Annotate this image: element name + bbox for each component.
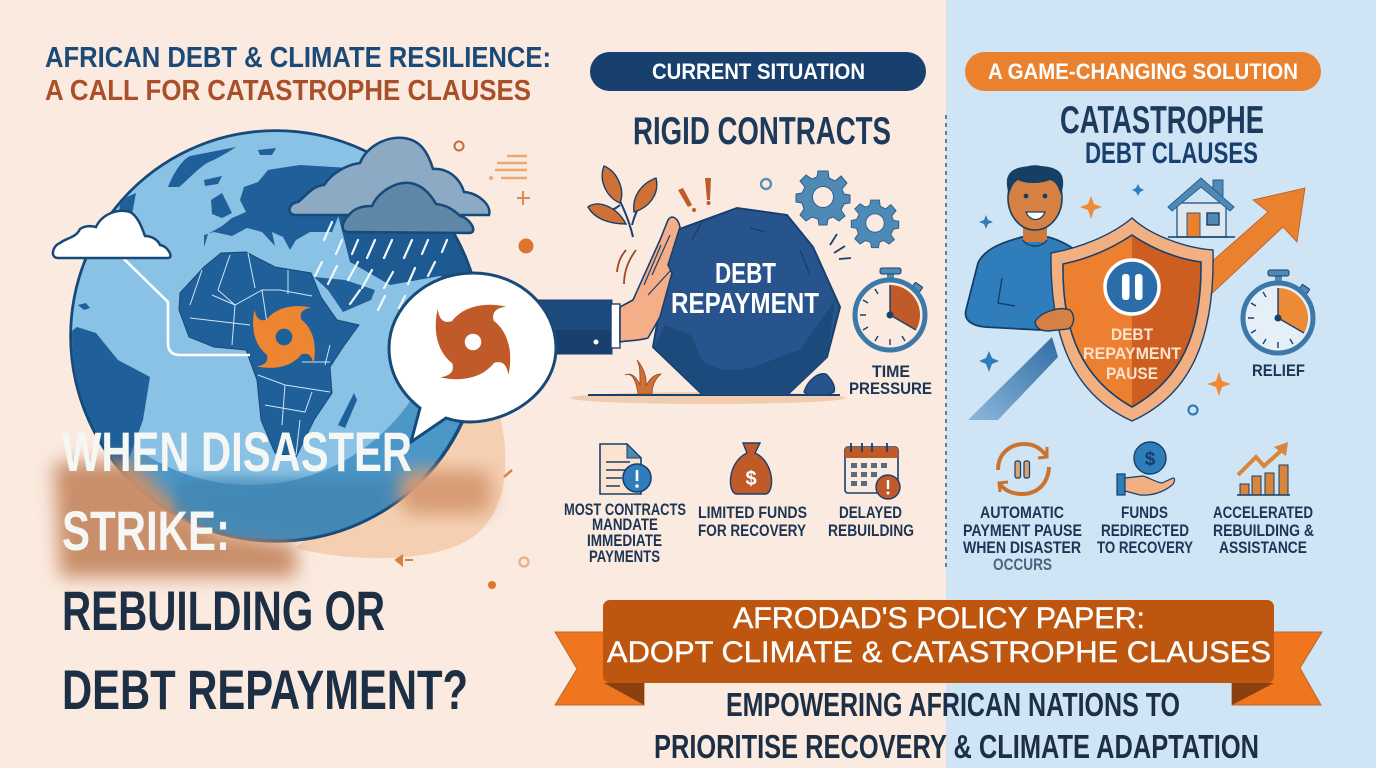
label: accelerated rebuilding — [1213, 503, 1314, 557]
headline: when disaster strike: REBUILDING OR — [62, 579, 385, 642]
ribbon tails — [555, 632, 1322, 705]
icon: white cloud — [53, 211, 170, 258]
icon: gear large — [796, 171, 850, 225]
pill: current situation: CURRENT SITUATION — [652, 59, 865, 84]
icon: growth arrow back — [968, 337, 1058, 420]
icon: automatic cycle — [998, 444, 1049, 494]
icon: person — [966, 166, 1085, 330]
label: automatic payment pause: OCCURS — [993, 555, 1052, 574]
icon: boulder debt repayment — [653, 208, 840, 395]
icon: document alert — [600, 444, 651, 494]
continent: Africa — [179, 252, 359, 457]
heading: catastrophe debt clauses: CATASTROPHE — [1060, 99, 1264, 142]
label: relief: RELIEF — [1252, 361, 1305, 380]
label: time pressure: TIME — [872, 362, 910, 381]
icon: strain lines — [830, 234, 851, 259]
label: automatic payment pause: AUTOMATIC — [980, 503, 1064, 522]
icon: stopwatch time pressure — [855, 268, 925, 350]
icon: small ring — [761, 179, 771, 189]
icon: house — [1168, 178, 1235, 237]
banner: policy paper: AFRODAD'S POLICY PAPER: — [733, 602, 1145, 635]
label: limited funds: FOR RECOVERY — [698, 521, 807, 540]
icon: motion lines — [617, 250, 636, 284]
label: contracts: IMMEDIATE — [587, 531, 662, 550]
label: funds redirected: FUNDS — [1121, 503, 1168, 522]
label: time pressure: PRESSURE — [849, 379, 932, 398]
icon: person's hand on shield — [1035, 309, 1074, 331]
boulder text: DEBT — [715, 258, 776, 290]
boulder text — [671, 258, 819, 320]
icon: hand with coin: $ — [1145, 449, 1156, 470]
label: delayed rebuilding: REBUILDING — [828, 521, 914, 540]
headline: when disaster strike: DEBT REPAYMENT? — [62, 658, 468, 721]
label: automatic payment pause — [963, 503, 1082, 574]
label: automatic payment pause: WHEN DISASTER — [963, 538, 1081, 557]
ground line — [570, 392, 846, 404]
icon: leaves — [588, 166, 657, 237]
sparkles — [979, 184, 1231, 414]
icon: stopwatch relief — [1243, 270, 1313, 353]
blurred smears behind headline — [54, 462, 492, 577]
label: contracts: PAYMENTS — [589, 547, 660, 566]
dark ocean region under the storm — [338, 216, 470, 285]
pill: solution: A GAME-CHANGING SOLUTION — [988, 59, 1298, 84]
label: accelerated rebuilding: ASSISTANCE — [1219, 538, 1307, 557]
globe illustration — [69, 129, 472, 543]
headline: when disaster strike: WHEN DISASTER — [62, 420, 412, 483]
icon: gear small — [851, 200, 899, 248]
headline: when disaster strike: STRIKE: — [62, 499, 230, 562]
label: contracts: MANDATE — [592, 515, 658, 534]
banner: policy paper — [555, 600, 1322, 705]
shield text: PAUSE — [1106, 364, 1158, 383]
label: delayed rebuilding: DELAYED — [839, 503, 902, 522]
icon: speech bubble with cyclone — [389, 273, 556, 442]
title: A CALL FOR CATASTROPHE CLAUSES — [45, 75, 531, 107]
icon: growth chart — [1237, 442, 1290, 495]
label: limited funds — [698, 503, 807, 540]
pill: current situation — [590, 52, 926, 91]
icon: money bag: $ — [745, 468, 757, 490]
decorative marks — [396, 142, 534, 589]
heading: catastrophe debt clauses — [1060, 99, 1264, 170]
shield text — [1083, 325, 1182, 383]
boulder text: REPAYMENT — [671, 288, 819, 320]
label: contracts: MOST CONTRACTS — [564, 500, 686, 519]
label: delayed rebuilding — [828, 503, 914, 540]
continent: South America — [72, 327, 150, 469]
label: funds redirected: TO RECOVERY — [1097, 538, 1194, 557]
label: time pressure — [849, 362, 932, 398]
icon: growth arrow orange — [1200, 188, 1305, 300]
label: accelerated rebuilding: ACCELERATED — [1213, 503, 1313, 522]
banner: policy paper: ADOPT CLIMATE & CATASTROPHE CLAUSES — [607, 636, 1271, 669]
continent: Madagascar — [338, 393, 357, 428]
icon: orange cyclone on Africa — [253, 306, 315, 368]
shield text: DEBT — [1111, 325, 1154, 344]
icon: hand — [611, 217, 680, 348]
headline: when disaster strike — [62, 420, 468, 721]
icon: storm clouds — [289, 138, 489, 233]
label: automatic payment pause: PAYMENT PAUSE — [963, 521, 1082, 540]
icon: shield debt repayment pause — [1051, 218, 1213, 421]
label: funds redirected — [1097, 503, 1194, 557]
icon: grass — [625, 360, 661, 394]
title — [45, 42, 551, 107]
title: AFRICAN DEBT & CLIMATE RESILIENCE: — [45, 42, 551, 74]
background: right blue panel — [946, 0, 1376, 768]
icon: suit sleeve — [533, 300, 612, 354]
heading: catastrophe debt clauses: DEBT CLAUSES — [1085, 137, 1258, 170]
label: funds redirected: REDIRECTED — [1101, 521, 1189, 540]
label: limited funds: LIMITED FUNDS — [698, 503, 807, 522]
icon: exclamation marks — [678, 178, 711, 212]
connector line from cloud — [123, 258, 250, 355]
tagline: EMPOWERING AFRICAN NATIONS TO — [726, 686, 1180, 723]
icon: calendar alert — [845, 443, 900, 499]
shield text: REPAYMENT — [1083, 344, 1182, 363]
continent: Europe and Asia — [204, 165, 350, 250]
icon: rain — [315, 222, 447, 310]
heading: rigid contracts: RIGID CONTRACTS — [633, 110, 891, 153]
label: accelerated rebuilding: REBUILDING & — [1213, 521, 1314, 540]
background: left peach panel — [0, 0, 946, 768]
icon: money bag — [730, 443, 772, 494]
icon: small rock — [804, 374, 835, 395]
icon: hand with coin — [1117, 442, 1175, 495]
pill: solution — [965, 52, 1321, 91]
peach blob behind globe — [296, 415, 505, 558]
tagline — [654, 686, 1259, 765]
label: contracts — [564, 500, 686, 566]
